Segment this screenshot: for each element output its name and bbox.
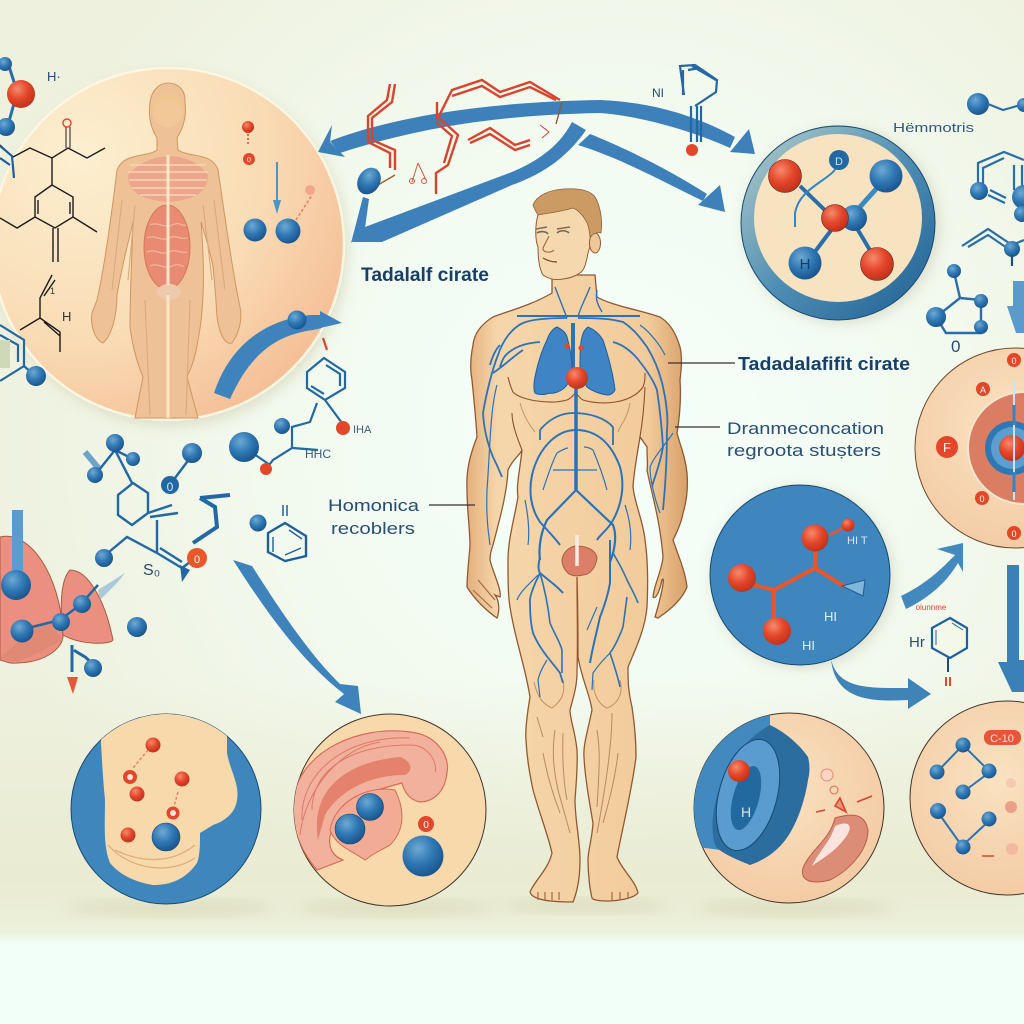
arrow: small down right bbox=[1007, 281, 1024, 333]
panel: receptor circle right edge bbox=[915, 348, 1024, 548]
label: tadalafil citrate left: Tadalalf cirate bbox=[361, 265, 489, 286]
chemical structure: top right cluster bbox=[962, 93, 1024, 266]
central human figure bbox=[467, 189, 687, 902]
blue capsule atom bbox=[352, 163, 386, 199]
pointer lines and labels bbox=[328, 354, 910, 538]
head bbox=[533, 189, 602, 280]
panel: blue molecule circle bbox=[710, 485, 893, 668]
label: tadalafil citrate right: Tadadalafifit cirate bbox=[738, 354, 910, 374]
label: hemmotris: Hëmmotris bbox=[893, 120, 975, 135]
panel: receptor circle right edge: 0 bbox=[1011, 356, 1017, 366]
chemical structure: small ring with label: Hr bbox=[909, 634, 925, 651]
chest, knee and shin lines bbox=[473, 373, 645, 900]
panel: molecule network circle: C-10 bbox=[990, 733, 1014, 745]
small red marker bbox=[410, 125, 549, 184]
chemical structure: top center right: NI bbox=[652, 86, 664, 100]
label: regulation clusters: Dranmeconcation bbox=[727, 419, 884, 438]
panel: blue molecule circle: HI bbox=[824, 609, 837, 624]
chemical structure: black skeleton in circle: 1 bbox=[50, 286, 55, 296]
arrow: up right to receptor bbox=[901, 543, 963, 609]
chemical structure: black skeleton in circle bbox=[0, 119, 105, 352]
chemical structure: central left upper: HHC bbox=[305, 447, 331, 461]
arrow: diagonal down to brain bbox=[233, 560, 361, 714]
chemical structure: central left lower: 0 bbox=[167, 480, 174, 494]
chemical structure: small ring with label: oiunnme bbox=[916, 603, 947, 612]
panel: receptor circle right edge: 0 bbox=[979, 494, 985, 504]
panel: blue molecule circle: HI T bbox=[847, 535, 868, 547]
panel: skin fold circle bbox=[71, 700, 261, 904]
chemical structure: top center right bbox=[652, 65, 717, 156]
chemical structure: central left lower: S₀ bbox=[143, 562, 160, 579]
pointer lines and labels: regroota stuṣters bbox=[727, 441, 881, 460]
panel: blue molecule circle: HI bbox=[802, 638, 815, 653]
chemical structure: hexagon with atom bbox=[250, 505, 306, 561]
panel: disc and tissue circle bbox=[690, 713, 884, 903]
panel: lungs at left bbox=[0, 510, 147, 694]
chemical structure: red chains top center bbox=[368, 80, 562, 194]
curved blue arrow in circle bbox=[214, 310, 342, 399]
pelvic organ bbox=[562, 535, 597, 576]
panel: brain cross-section circle bbox=[292, 714, 486, 906]
chemical structure: central left upper: IHA bbox=[353, 424, 372, 436]
chemical structure: central left lower bbox=[85, 434, 230, 582]
panel: brain cross-section circle: 0 bbox=[423, 820, 429, 831]
panel: molecule circle top right: D bbox=[835, 156, 843, 168]
panel: molecule circle top right: H bbox=[800, 256, 810, 273]
lungs bbox=[534, 327, 615, 395]
panel: disc and tissue circle: H bbox=[741, 804, 751, 820]
chemical structure: top left corner: H· bbox=[47, 69, 61, 84]
small body figure bbox=[92, 83, 241, 418]
label: hormonal receptors: Homonica bbox=[328, 496, 420, 515]
chemical structure: central left upper bbox=[229, 338, 372, 475]
chemical structure: left blue fragment bbox=[0, 146, 46, 386]
panel: molecule network circle bbox=[910, 701, 1024, 895]
chemical structure: top left corner bbox=[0, 57, 61, 136]
pointer lines and labels: recoblers bbox=[331, 519, 415, 538]
chemical structure: black skeleton in circle: H bbox=[62, 309, 71, 324]
molecule markers in circle bbox=[242, 121, 315, 244]
vessels bbox=[483, 287, 673, 697]
panel: molecule circle top right bbox=[741, 126, 939, 323]
panel: receptor circle right edge: 0 bbox=[1011, 529, 1017, 539]
chemical structure: central left lower: 0 bbox=[194, 554, 200, 566]
arrow: top center to left circle bbox=[318, 100, 755, 243]
chemical structure: small ring with label bbox=[909, 603, 967, 686]
chemical structure: pentagon ring: 0 bbox=[951, 337, 960, 356]
chemical structure: pentagon ring bbox=[926, 264, 988, 356]
panel: body anatomy circle bbox=[0, 68, 348, 426]
panel: receptor circle right edge: F bbox=[943, 440, 951, 455]
molecule markers in circle: 0 bbox=[247, 157, 251, 164]
arrow: curve from blue circle to ring bbox=[831, 659, 931, 709]
panel: receptor circle right edge: A bbox=[980, 385, 986, 395]
arrow: long down right bbox=[998, 565, 1024, 692]
